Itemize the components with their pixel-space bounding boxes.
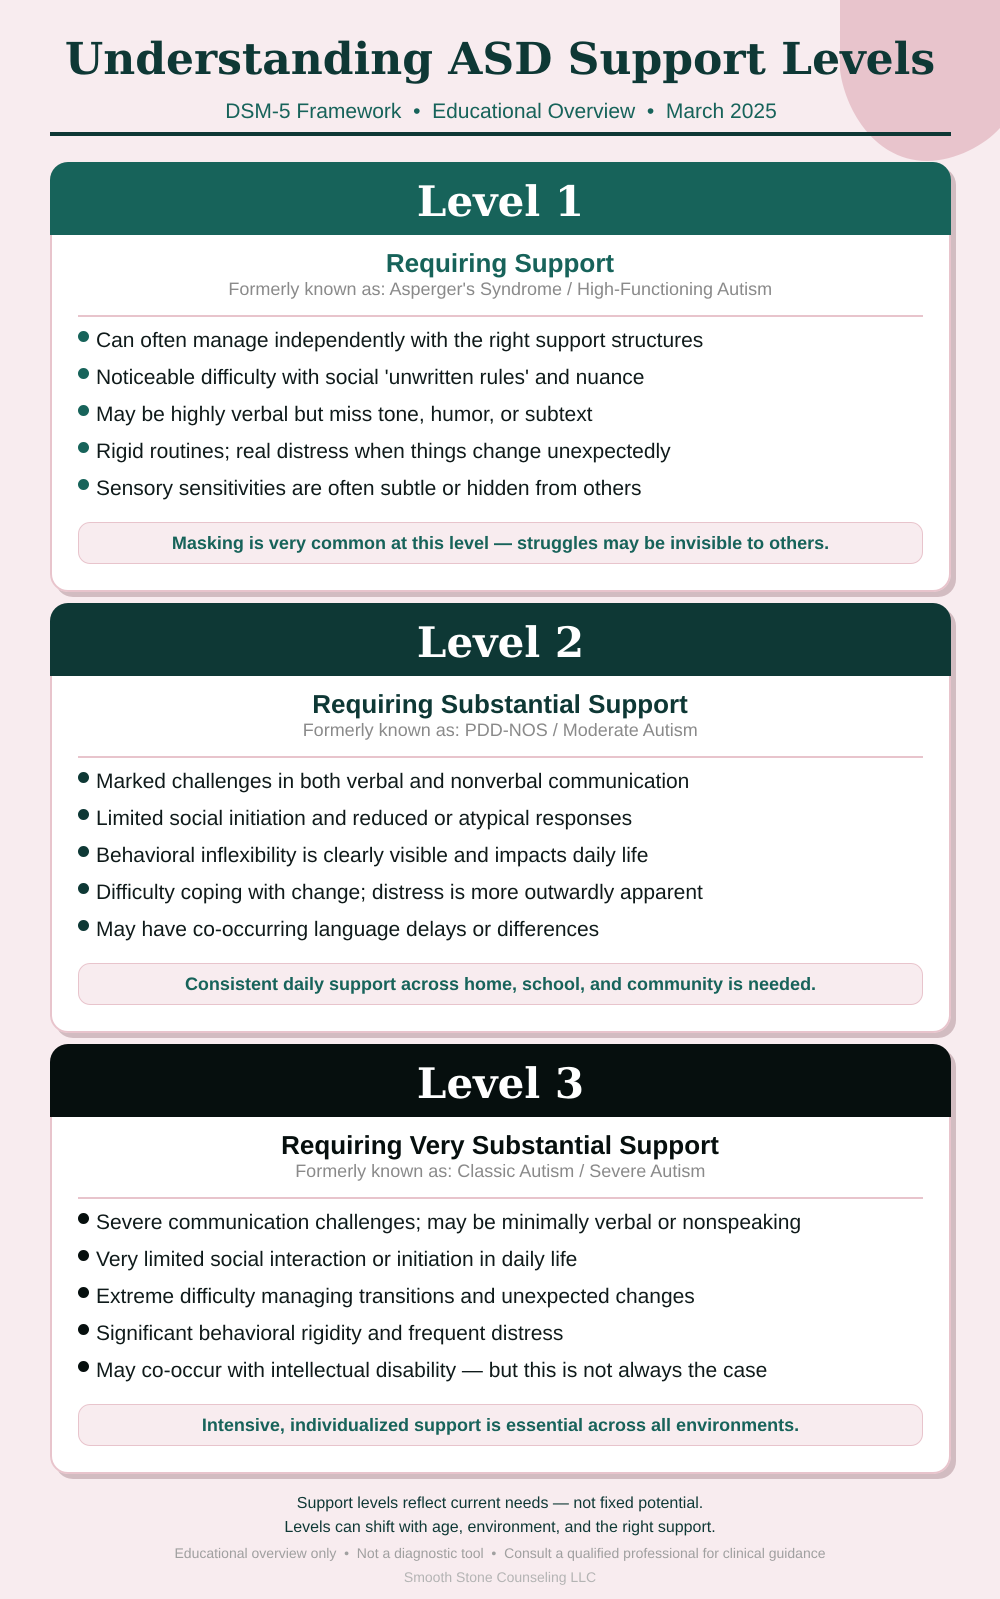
footer credit: Smooth Stone Counseling LLC xyxy=(404,1569,596,1585)
level 1 bullet list: Noticeable difficulty with social 'unwritten rules' and nuance xyxy=(96,366,644,389)
level 2 header band: Level 2 xyxy=(417,618,584,667)
level 2 bullet list: May have co-occurring language delays or differences xyxy=(96,918,599,941)
level 3 bullet list: Severe communication challenges; may be minimally verbal or nonspeaking xyxy=(96,1211,801,1234)
level 1 heading: Requiring Support xyxy=(386,248,614,278)
level 1 callout: Masking is very common at this level — struggles may be invisible to others. xyxy=(172,533,829,553)
level 3 header band xyxy=(50,1044,951,1117)
level 3 callout: Intensive, individualized support is essential across all environments. xyxy=(202,1415,799,1435)
level 2 callout xyxy=(78,963,923,1005)
level 2 callout: Consistent daily support across home, school, and community is needed. xyxy=(185,974,816,994)
level 2 bullet list: Behavioral inflexibility is clearly visible and impacts daily life xyxy=(96,844,648,867)
header rule xyxy=(50,132,951,136)
level 3 heading: Requiring Very Substantial Support xyxy=(281,1130,719,1160)
level 3 bullet list: Significant behavioral rigidity and frequent distress xyxy=(96,1322,563,1345)
title: Understanding ASD Support Levels xyxy=(65,34,935,85)
level 1 callout xyxy=(78,522,923,564)
decorative corner shape xyxy=(840,0,1000,161)
subtitle: DSM-5 Framework • Educational Overview • March 2025 xyxy=(225,100,777,123)
level 3 bullet list: Very limited social interaction or initiation in daily life xyxy=(96,1248,577,1271)
level 3 bullet list: Extreme difficulty managing transitions and unexpected changes xyxy=(96,1285,695,1308)
level 1 bullet list: Rigid routines; real distress when things change unexpectedly xyxy=(96,440,671,463)
footer disclaimer: Educational overview only • Not a diagnostic tool • Consult a qualified professional for clinical guidance xyxy=(174,1545,826,1561)
level 2 former names: Formerly known as: PDD-NOS / Moderate Autism xyxy=(303,720,698,740)
level 3 bullet list: May co-occur with intellectual disability — but this is not always the case xyxy=(96,1359,767,1382)
level 1 header band: Level 1 xyxy=(417,177,584,226)
panel: level 3 xyxy=(50,1044,951,1474)
level 3 former names: Formerly known as: Classic Autism / Severe Autism xyxy=(295,1161,705,1181)
level 1 bullet list: Can often manage independently with the right support structures xyxy=(96,329,703,352)
level 2 bullet list xyxy=(78,770,703,941)
level 2 header band xyxy=(50,603,951,676)
panel: level 2 xyxy=(50,603,951,1033)
footer message line 1: Support levels reflect current needs — not fixed potential. xyxy=(297,1495,703,1512)
level 1 header band xyxy=(50,162,951,235)
panel: level 1 xyxy=(50,162,951,592)
level 2 bullet list: Marked challenges in both verbal and nonverbal communication xyxy=(96,770,689,793)
level 2 bullet list: Difficulty coping with change; distress is more outwardly apparent xyxy=(96,881,703,904)
level 1 bullet list: Sensory sensitivities are often subtle or hidden from others xyxy=(96,477,641,500)
level 1 former names: Formerly known as: Asperger's Syndrome / High-Functioning Autism xyxy=(228,279,772,299)
level 2 bullet list: Limited social initiation and reduced or atypical responses xyxy=(96,807,632,830)
footer message line 2: Levels can shift with age, environment, and the right support. xyxy=(284,1519,716,1536)
level 2 heading: Requiring Substantial Support xyxy=(312,689,688,719)
level 3 callout xyxy=(78,1404,923,1446)
level 1 bullet list: May be highly verbal but miss tone, humor, or subtext xyxy=(96,403,593,426)
level 3 header band: Level 3 xyxy=(417,1059,584,1108)
level 1 bullet list xyxy=(78,329,703,500)
level 3 bullet list xyxy=(78,1211,801,1382)
